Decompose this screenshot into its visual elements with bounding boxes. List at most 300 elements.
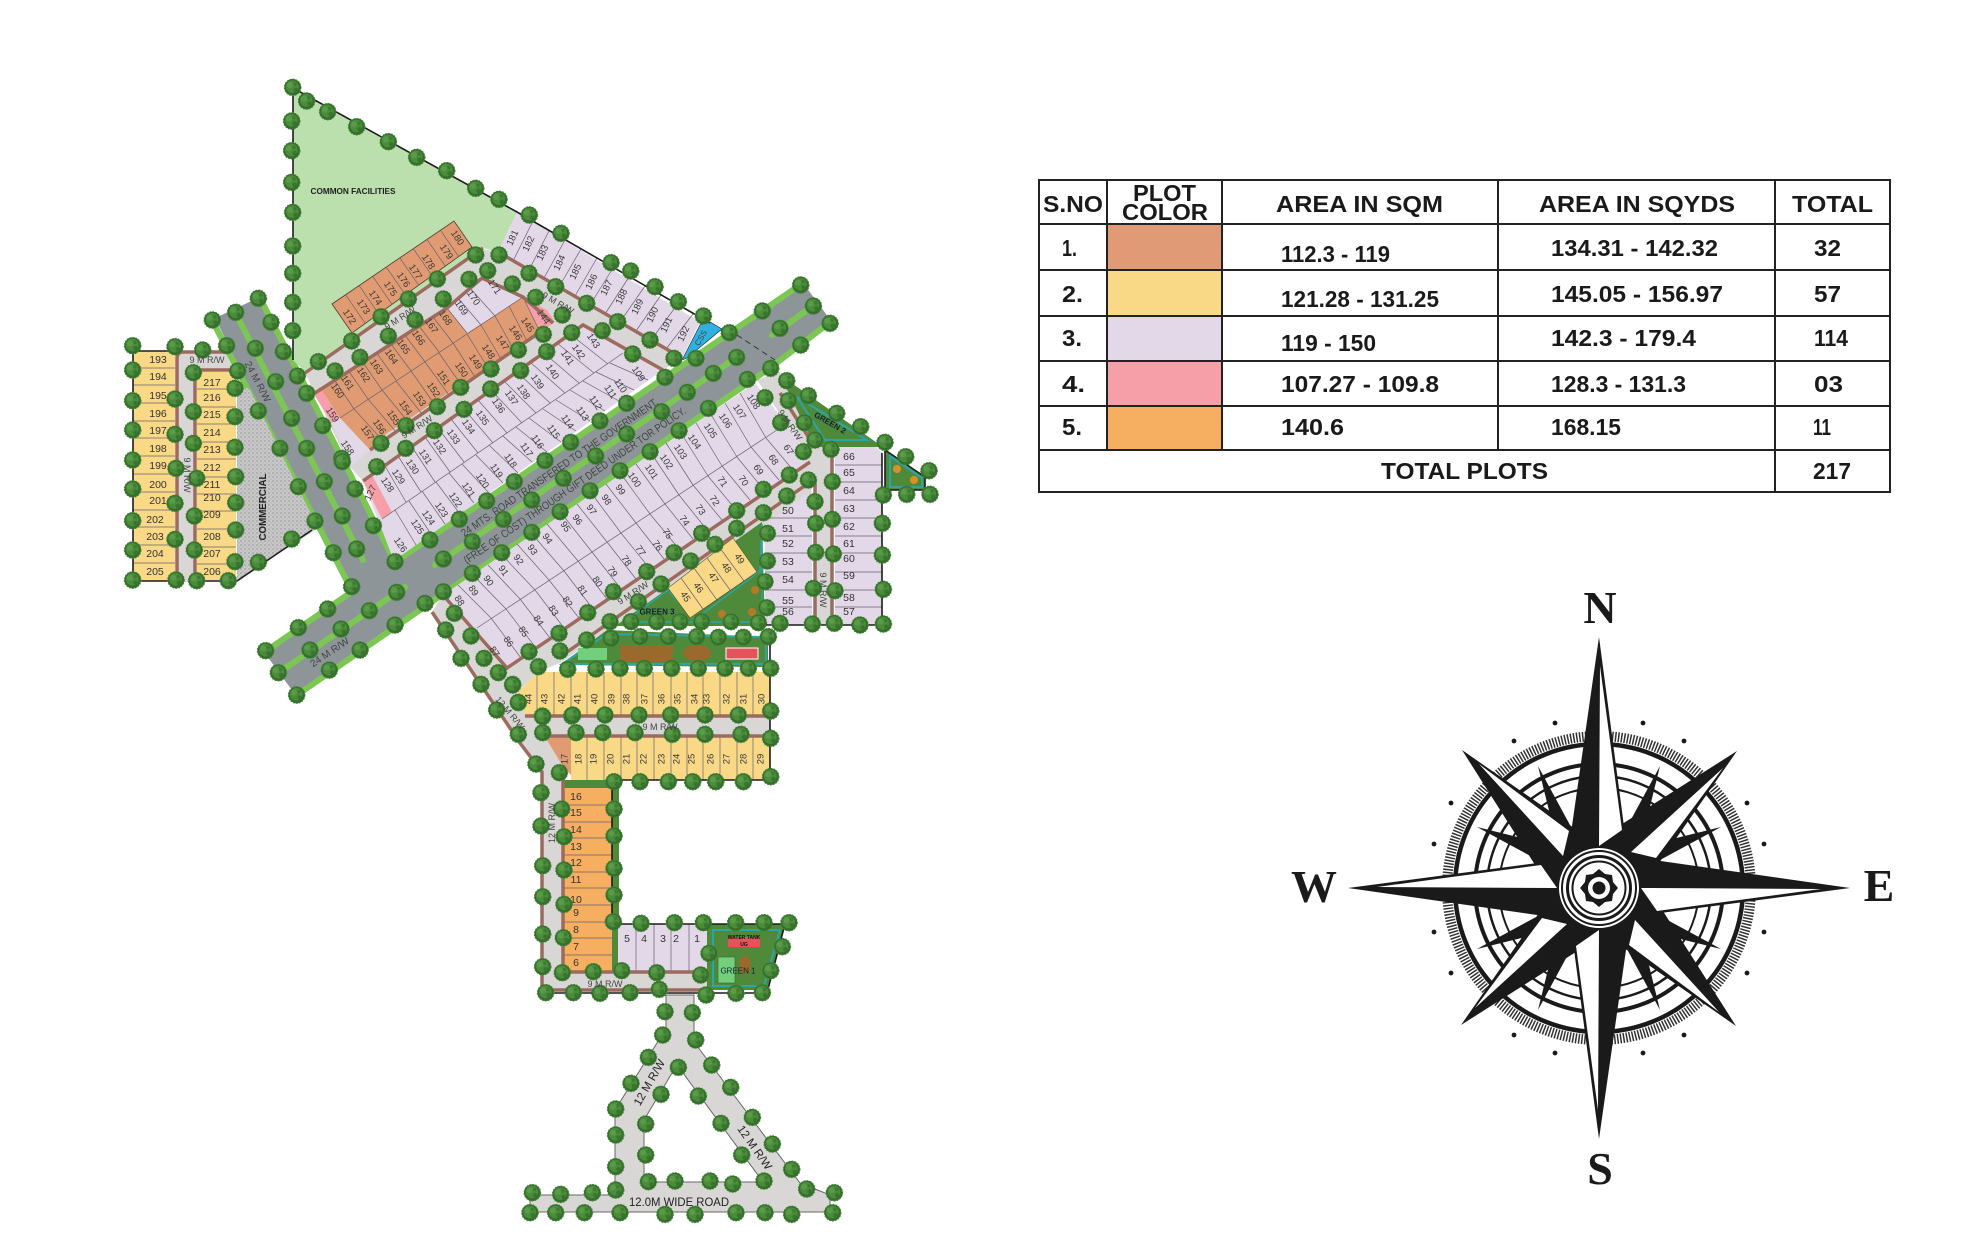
24 m main roads: [215, 283, 832, 697]
compass cardinal points: [1348, 637, 1850, 1139]
plot numbers 1-16: [570, 791, 700, 969]
plot numbers 67-108: 98: [598, 493, 614, 507]
plot numbers 109-143: 113: [573, 405, 591, 423]
plot numbers 50-66: 53: [782, 556, 794, 568]
plot numbers 30-44: 30: [756, 694, 768, 704]
plots: yellow 45-49: [668, 538, 757, 618]
plot numbers 193-217: 209: [203, 509, 221, 521]
map area and road labels: 12 M R/W: [734, 1124, 774, 1172]
plot numbers 181-192: 191: [659, 315, 675, 335]
plot numbers 50-66: 50: [782, 505, 794, 517]
dashed road line: [737, 335, 775, 360]
compass south letter: S: [1587, 1143, 1613, 1194]
map area and road labels: 9 M R/W: [540, 290, 576, 316]
plot numbers 193-217: 212: [203, 462, 221, 474]
plot numbers 144-171: 167: [422, 316, 440, 336]
plot: CSS blue: [682, 322, 722, 360]
compass centre hub: [1559, 848, 1639, 928]
plot numbers 109-143: 117: [517, 441, 535, 459]
plot numbers 193-217: 207: [203, 548, 221, 560]
map area and road labels: (FREE OF COST) THROUGH GIFT DEED UNDER TOR POLICY.: [462, 405, 688, 567]
plot numbers 172-180: 176: [394, 270, 412, 290]
plot numbers 67-108: 94: [539, 532, 555, 546]
plot numbers 67-108: 99: [612, 483, 628, 497]
plot numbers 67-108: 81: [574, 584, 590, 598]
table row 3: 119 - 150: [1281, 330, 1376, 356]
plot numbers 1-16: 8: [573, 924, 579, 936]
plot numbers 67-108: 97: [583, 503, 599, 517]
table row 4: [1062, 371, 1843, 397]
plot numbers 1-16: 5: [624, 933, 630, 945]
plot numbers 17-29: 27: [722, 754, 732, 764]
green area teal outlines and features: [562, 397, 922, 986]
plots: block 109-143 lilac with pink 127: [363, 325, 663, 556]
plot numbers 67-108: 73: [692, 503, 708, 517]
plot numbers 67-108: 78: [618, 554, 634, 568]
plot numbers 30-44: 41: [572, 694, 584, 704]
plot numbers 50-66: 51: [782, 523, 794, 535]
plot numbers 144-171: 159: [323, 405, 341, 425]
plot numbers 109-143: 129: [389, 467, 407, 487]
plot numbers 67-108: 79: [604, 565, 620, 579]
plot numbers 144-171: 154: [396, 398, 414, 418]
table grid: [1038, 180, 1891, 492]
table row 2: 2.: [1062, 281, 1083, 307]
table row 4: 03: [1814, 371, 1843, 397]
plot numbers 193-217: 202: [146, 514, 164, 526]
plot numbers 172-180: 173: [354, 297, 372, 317]
plot numbers 109-143: [363, 331, 647, 555]
plot numbers 67-108: 87: [486, 645, 502, 659]
plot numbers 193-217: 200: [149, 479, 167, 491]
map area and road labels: GREEN 3: [639, 608, 675, 616]
plot numbers 17-29: 22: [638, 754, 650, 764]
plot numbers 181-192: 181: [505, 228, 521, 248]
plot numbers 172-180: 178: [419, 252, 437, 272]
plot numbers 1-16: 11: [571, 874, 582, 886]
plots: yellow 18-29 and orange 17: [545, 737, 770, 780]
plot numbers 1-16: 6: [573, 957, 579, 969]
map area and road labels: 9 M R/W: [190, 355, 225, 365]
plot numbers 17-29: 24: [672, 754, 682, 764]
map area and road labels: 9 M R/W: [642, 722, 678, 732]
plot numbers 144-171: 147: [493, 333, 511, 353]
plot numbers 109-143: 109: [629, 364, 647, 384]
plot numbers 17-29: 21: [622, 754, 632, 764]
plot numbers 17-29: 20: [606, 754, 616, 764]
plot numbers 17-29: 23: [656, 754, 668, 764]
plot numbers 181-192: 185: [568, 262, 584, 282]
plot numbers 144-171: 145: [518, 315, 536, 335]
plot numbers 30-44: 36: [656, 694, 668, 704]
plots: lilac 1-5: [618, 924, 707, 972]
plot numbers 30-44: 32: [722, 694, 732, 704]
common facilities plot: [293, 88, 517, 372]
table row 5: 140.6: [1281, 414, 1344, 440]
table total row: TOTAL PLOTS: [1381, 458, 1548, 484]
plot numbers 30-44: 44: [524, 694, 534, 704]
colour swatches: [1108, 225, 1222, 450]
plot numbers 193-217: 208: [203, 531, 221, 543]
map area and road labels: 24 MTS. ROAD TRANSFERED TO THE GOVERNMENT.: [459, 396, 661, 540]
plot numbers 67-108: 76: [649, 539, 665, 553]
plots: yellow 30-44: [518, 672, 770, 715]
plot numbers 144-171: 162: [354, 365, 372, 385]
plot numbers 144-171: 156: [370, 417, 388, 437]
map area and road labels: GREEN 2: [813, 410, 848, 436]
plot numbers 67-108: 102: [657, 452, 675, 472]
plot numbers 181-192: 183: [535, 243, 551, 263]
plot numbers 181-192: 188: [614, 287, 630, 307]
plot numbers 50-66: 60: [843, 553, 855, 565]
map area and road labels: GREEN 1: [720, 966, 756, 976]
trees north-east section: [578, 254, 938, 677]
plot numbers 67-108: 101: [642, 462, 660, 482]
table row 2: 145.05 - 156.97: [1551, 281, 1723, 307]
brown road edges: [177, 248, 832, 990]
plot numbers 144-171: [323, 277, 552, 458]
plot numbers 67-108: 68: [765, 453, 781, 467]
plot numbers 193-217: 196: [149, 408, 167, 420]
plot numbers 109-143: 126: [391, 535, 409, 555]
south triangle 12 m road: [530, 995, 830, 1212]
plot numbers 172-180: 175: [381, 279, 399, 299]
plot numbers 67-108: 67: [780, 443, 796, 457]
plot numbers 109-143: 111: [601, 383, 619, 401]
plot numbers 67-108: 103: [671, 442, 689, 462]
plot numbers 50-66: 57: [843, 606, 855, 618]
plot numbers 193-217: 203: [146, 531, 164, 543]
plots: lilac 57-66: [835, 447, 882, 625]
map area and road labels: COMMERCIAL: [257, 473, 269, 540]
plot numbers 67-108: 72: [706, 494, 722, 508]
compass rings and dots: [1432, 721, 1766, 1055]
map area and road labels: 9 M R/W: [616, 579, 651, 607]
table header row: PLOT: [1133, 180, 1196, 206]
plot numbers 144-171: 163: [367, 357, 385, 377]
plot numbers 144-171: 169: [452, 298, 470, 318]
table header row: AREA IN SQM: [1276, 191, 1443, 217]
map area and road labels: 9 M R/W: [818, 572, 828, 608]
plot numbers 50-66: 66: [843, 451, 855, 463]
plot numbers 30-44: 43: [540, 694, 550, 704]
map area and road labels: 9 M R/W: [776, 408, 804, 443]
map area and road labels: 9 M R/W: [400, 413, 435, 441]
plot numbers 67-108: 84: [530, 614, 546, 628]
plot numbers 144-171: 157: [358, 423, 376, 443]
compass secondary spikes: [1477, 766, 1721, 1010]
table row 5: 168.15: [1551, 414, 1621, 440]
plot numbers 1-16: 2: [673, 933, 679, 945]
trees west and junction section: [124, 452, 580, 724]
plot numbers 193-217: 205: [146, 566, 164, 578]
plot numbers 109-143: 123: [432, 500, 450, 520]
plot numbers 109-143: 124: [419, 508, 437, 528]
plot numbers 1-16: 16: [570, 791, 582, 803]
plot numbers 30-44: 35: [672, 694, 684, 704]
plot numbers 67-108: 93: [524, 543, 540, 557]
plot numbers 17-29: 18: [574, 754, 584, 764]
table row 2: 121.28 - 131.25: [1281, 286, 1439, 312]
map area and road labels: 12 M R/W: [632, 1058, 668, 1108]
plot numbers 1-16: 14: [570, 824, 582, 836]
table row 3: 3.: [1062, 325, 1082, 351]
plot summary table: [1038, 180, 1891, 492]
trees along triangle road: [522, 1003, 843, 1223]
plot numbers 193-217: 214: [203, 427, 221, 439]
plot numbers 144-171: 160: [328, 381, 346, 401]
plot numbers 193-217: 215: [203, 409, 221, 421]
plot numbers 181-192: 186: [584, 272, 600, 292]
table row 3: 142.3 - 179.4: [1551, 325, 1696, 351]
map area and road labels: 12 M R/W: [493, 694, 527, 732]
plot numbers 144-171: 164: [382, 347, 400, 367]
plot numbers 1-16: 7: [573, 941, 579, 953]
plot numbers 144-171: 151: [434, 368, 452, 388]
plot numbers 67-108: 107: [730, 402, 748, 422]
plots: block 67-108 lilac: [443, 383, 810, 668]
plot numbers 193-217: 210: [203, 492, 221, 504]
plot numbers 193-217: 197: [149, 425, 167, 437]
plot numbers 45-49: [677, 552, 747, 604]
plot numbers 172-180: 172: [340, 307, 358, 327]
table row 3: 114: [1814, 325, 1848, 351]
plots: orange 6-16: [563, 788, 612, 972]
plot numbers 45-49: 46: [690, 581, 706, 595]
plot numbers 109-143: 130: [403, 457, 421, 477]
black boundary lines: [133, 88, 925, 993]
plot numbers 109-143: 125: [408, 517, 426, 537]
plot numbers 109-143: 141: [558, 348, 576, 368]
plot numbers 50-66: 63: [843, 503, 855, 515]
trees south section: [504, 677, 797, 1003]
plot numbers 181-192: 184: [552, 253, 568, 273]
table header row: [1043, 180, 1873, 225]
plot numbers 144-171: 144: [534, 307, 552, 327]
plot numbers 67-108: 86: [500, 635, 516, 649]
plot numbers 30-44: 34: [690, 694, 700, 704]
map area and road labels: UG: [740, 942, 748, 948]
plot numbers 30-44: 37: [640, 694, 650, 704]
plot numbers 193-217: 198: [149, 443, 167, 455]
map area and road labels: 24 M R/W: [242, 360, 273, 405]
plot numbers 1-16: 10: [570, 894, 582, 906]
plot numbers 144-171: 158: [338, 438, 356, 458]
plot numbers 45-49: 49: [731, 552, 747, 566]
plot numbers 193-217: 211: [204, 479, 221, 491]
plot numbers 144-171: 146: [506, 323, 524, 343]
table total row: 217: [1813, 458, 1851, 484]
plot numbers 67-108: 89: [465, 584, 481, 598]
plot numbers 109-143: 128: [378, 475, 396, 495]
plot numbers 109-143: 122: [446, 490, 464, 510]
plot numbers 50-66: 54: [782, 574, 794, 586]
plot numbers 193-217: 216: [203, 392, 221, 404]
map area and road labels: 9 M R/W: [383, 304, 418, 332]
plot numbers 109-143: 120: [473, 471, 491, 491]
plot numbers 67-108: 69: [750, 463, 766, 477]
plots: top orange row 172-180: [332, 221, 472, 333]
plot numbers 67-108: 104: [685, 432, 703, 452]
road median green strips: [212, 285, 829, 695]
plot numbers 144-171: 153: [410, 389, 428, 409]
plot numbers 17-29: 28: [738, 754, 750, 764]
plot numbers 109-143: 134: [459, 417, 477, 437]
plot numbers 67-108: 75: [659, 527, 675, 541]
plots: lilac 50-56: [765, 495, 812, 625]
plot numbers 172-180: 180: [448, 228, 466, 248]
compass west letter: W: [1291, 861, 1337, 912]
plot numbers 193-217: 194: [149, 371, 167, 383]
plot numbers 109-143: 119: [487, 462, 505, 480]
map area and road labels: 9 M R/W: [588, 979, 623, 989]
map area and road labels: WATER TANK: [728, 935, 761, 941]
plot numbers 67-108: 74: [676, 514, 692, 528]
plot numbers 144-171: 171: [485, 277, 503, 297]
plot numbers 193-217: 195: [149, 390, 167, 402]
plot numbers 30-44: 33: [702, 694, 712, 704]
plot numbers 1-16: 13: [570, 841, 582, 853]
table header row: AREA IN SQYDS: [1539, 191, 1735, 217]
plot numbers 67-108: 106: [716, 411, 734, 431]
map area and road labels: 9 M R/W: [182, 458, 192, 493]
plot numbers 45-49: 47: [705, 571, 721, 585]
plot numbers 172-180: 177: [406, 262, 424, 282]
plot numbers 67-108: [451, 392, 796, 659]
plot numbers 109-143: 118: [501, 452, 519, 470]
map area and road labels: 12.0M WIDE ROAD: [629, 1197, 729, 1209]
compass north letter: N: [1583, 582, 1617, 633]
plot numbers 17-29: 26: [706, 754, 716, 764]
plot numbers 193-217: 213: [203, 444, 221, 456]
plot numbers 67-108: 91: [495, 564, 511, 578]
plot numbers 109-143: 112: [586, 394, 604, 412]
plot numbers 1-16: 12: [570, 857, 582, 869]
plot numbers 144-171: 155: [384, 408, 402, 428]
table row 3: [1062, 325, 1848, 356]
plot numbers 45-49: 48: [718, 561, 734, 575]
table row 1: 134.31 - 142.32: [1551, 235, 1718, 261]
plot numbers 17-29: [560, 754, 766, 764]
plot numbers 181-192: [505, 228, 692, 344]
plot numbers 144-171: 165: [394, 337, 412, 357]
light grey internal roads: [178, 247, 832, 990]
plot numbers 67-108: 100: [625, 470, 643, 490]
plot numbers 50-66: 62: [843, 521, 855, 533]
plot numbers 144-171: 149: [466, 352, 484, 372]
plot numbers 30-44: 40: [590, 694, 600, 704]
plot numbers 50-66: [782, 451, 855, 618]
plot numbers 144-171: 166: [409, 328, 427, 348]
map area and road labels: CSS: [693, 329, 709, 347]
plot numbers 172-180: 179: [437, 242, 455, 262]
table row 1: 32: [1814, 235, 1841, 261]
plot numbers 109-143: 138: [514, 382, 532, 402]
table header row: S.NO: [1043, 191, 1103, 217]
plot numbers 181-192: 189: [630, 297, 646, 317]
plot numbers 109-143: 139: [528, 372, 546, 392]
plot numbers 67-108: 82: [559, 595, 575, 609]
plot numbers 109-143: 140: [543, 362, 561, 382]
plot numbers 67-108: 96: [569, 513, 585, 527]
plots: upper lilac row 181-192: [498, 212, 700, 358]
compass diagonal points: [1461, 750, 1737, 1026]
table row 5: 5.: [1062, 414, 1082, 440]
plot numbers 67-108: 77: [632, 544, 648, 558]
plot numbers 193-217: 201: [149, 495, 167, 507]
table row 4: 4.: [1062, 371, 1085, 397]
plot numbers 193-217: 199: [149, 460, 167, 472]
table row 2: [1062, 281, 1841, 312]
plot numbers 109-143: 127: [363, 483, 379, 503]
plot numbers 1-16: 1: [694, 933, 700, 945]
plot numbers 144-171: 168: [436, 308, 454, 328]
green areas: [560, 375, 925, 990]
plot numbers 30-44: [524, 694, 768, 704]
plot numbers 193-217: 204: [146, 548, 164, 560]
plot numbers 181-192: 187: [599, 278, 615, 298]
plot numbers 193-217: [146, 354, 221, 578]
map area and road labels: 12 M R/W: [547, 802, 557, 843]
plot numbers 67-108: 92: [510, 553, 526, 567]
plot numbers 109-143: 110: [611, 377, 629, 395]
map area and road labels: 24 M R/W: [308, 636, 352, 670]
plot numbers 144-171: 150: [452, 360, 470, 380]
plot numbers 1-16: 9: [573, 907, 579, 919]
compass rose: [1291, 582, 1894, 1194]
plot numbers 17-29: 25: [686, 754, 698, 764]
plot numbers 109-143: 133: [444, 427, 462, 447]
plot numbers 50-66: 59: [843, 570, 855, 582]
plot numbers 30-44: 39: [606, 694, 618, 704]
table row 1: 112.3 - 119: [1281, 241, 1390, 267]
plot numbers 30-44: 42: [556, 694, 568, 704]
plot numbers 109-143: 131: [416, 447, 434, 467]
plot numbers 144-171: 152: [424, 380, 442, 400]
plot numbers 17-29: 29: [756, 754, 766, 764]
plot numbers 109-143: 116: [528, 433, 546, 451]
plot numbers 1-16: 15: [570, 807, 582, 819]
plot numbers 109-143: 142: [569, 342, 587, 362]
plot numbers 109-143: 136: [489, 396, 507, 416]
plot numbers 181-192: 182: [521, 234, 537, 254]
plot numbers 1-16: 4: [641, 933, 647, 945]
plots: block 144-171 orange, pink and lilac: [313, 278, 555, 467]
table header row: COLOR: [1122, 199, 1208, 225]
table row 4: 107.27 - 109.8: [1281, 371, 1439, 397]
table row 4: 128.3 - 131.3: [1551, 371, 1686, 397]
plot numbers 67-108: 88: [451, 594, 467, 608]
plot numbers 193-217: 206: [203, 566, 221, 578]
plot numbers 144-171: 148: [479, 342, 497, 362]
compass east letter: E: [1864, 860, 1894, 911]
plot numbers 144-171: 161: [338, 373, 356, 393]
plot numbers 109-143: 114: [558, 413, 576, 431]
plot numbers 172-180: [340, 228, 466, 327]
plot numbers 67-108: 70: [735, 474, 751, 488]
plot numbers 67-108: 71: [714, 475, 730, 489]
plot numbers 67-108: 105: [701, 421, 719, 441]
plot numbers 50-66: 52: [782, 538, 794, 550]
site plan map: [124, 79, 938, 1223]
map area and road labels: [182, 186, 848, 1209]
plot numbers 109-143: 137: [502, 388, 520, 408]
plot numbers 30-44: 38: [622, 694, 632, 704]
plot numbers 50-66: 65: [843, 467, 855, 479]
plot numbers 67-108: 108: [744, 392, 762, 412]
plot numbers 193-217: 193: [149, 354, 167, 366]
plot numbers 67-108: 90: [480, 574, 496, 588]
